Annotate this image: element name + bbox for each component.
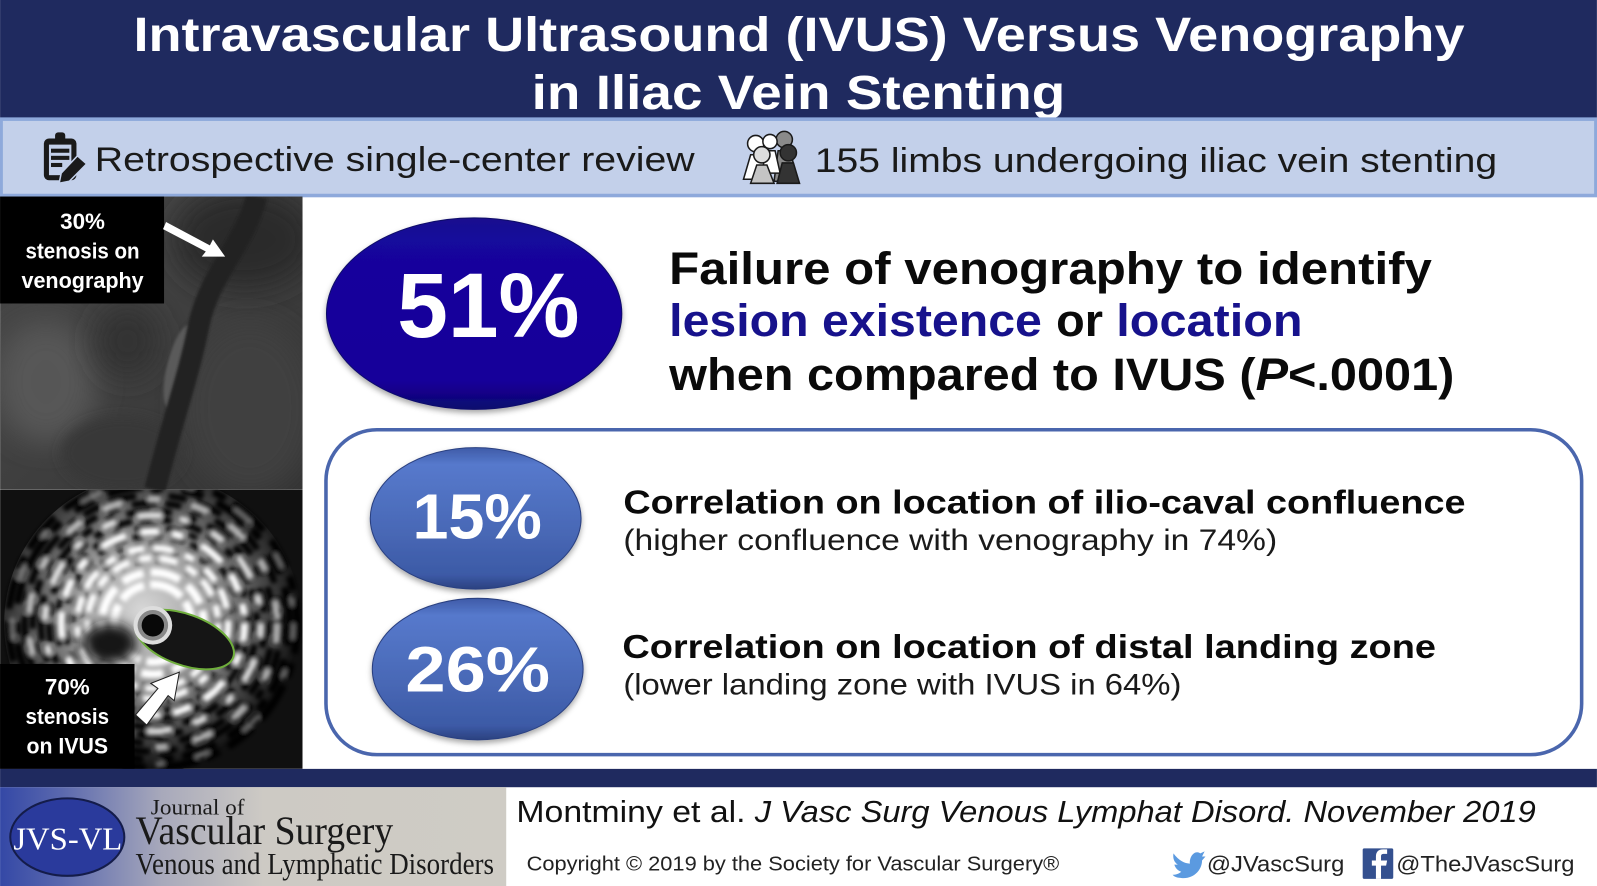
headline finding: or: [1056, 295, 1103, 346]
logo badge: [10, 798, 124, 876]
twitter handle: @JVascSurg: [1207, 852, 1344, 877]
title band: [0, 0, 1597, 120]
headline finding: when compared to IVUS ( P<.0001): [668, 349, 1454, 400]
facebook handle: [1363, 848, 1575, 879]
footer divider band: [0, 769, 1597, 787]
logo badge: JVS-VL: [13, 821, 122, 856]
icon: clipboard and pencil: [44, 132, 87, 183]
text: distal landing zone: [622, 629, 1436, 702]
label: 70% stenosis on IVUS: stenosis: [26, 704, 109, 729]
label: 70% stenosis on IVUS: 70%: [45, 675, 90, 700]
stat: 15%: 15%: [413, 481, 542, 553]
arrow: IVUS stenosis: [136, 672, 179, 725]
stat: 26%: [372, 598, 583, 740]
big stat: 51%: 51%: [397, 255, 580, 357]
text: ilio-caval confluence: Correlation on location of ilio-caval confluence: [623, 484, 1466, 521]
title line one: Intravascular Ultrasound (IVUS) Versus Venography: [133, 9, 1465, 62]
copyright: Copyright © 2019 by the Society for Vascular Surgery®: [527, 854, 1059, 876]
headline finding: Failure of venography to identify: [669, 243, 1432, 294]
title line two: in Iliac Vein Stenting: [532, 67, 1065, 120]
text: study design: Retrospective single-center review: [95, 141, 696, 179]
icon: twitter bird: [1173, 851, 1205, 878]
journal logo: Vascular Surgery: [136, 809, 393, 853]
text: distal landing zone: (lower landing zone with IVUS in 64%): [623, 669, 1181, 702]
journal logo: Venous and Lymphatic Disorders: [136, 847, 494, 881]
text: ilio-caval confluence: (higher confluence with venography in 74%): [623, 524, 1277, 557]
icon: group of people: [744, 131, 800, 183]
journal logo: [0, 787, 506, 886]
label: 30% stenosis on venography: [0, 197, 164, 303]
label: 30% stenosis on venography: venography: [21, 268, 144, 293]
facebook handle: @TheJVascSurg: [1396, 852, 1575, 877]
journal logo: Journal of: [151, 795, 245, 820]
lumen outline: [134, 606, 235, 670]
image: venography: [0, 188, 316, 494]
headline finding: [668, 243, 1454, 400]
text: study population: 155 limbs undergoing iliac vein stenting: [815, 142, 1497, 180]
citation: J Vasc Surg Venous Lymphat Disord. November 2019: [754, 795, 1536, 829]
label: 30% stenosis on venography: 30%: [60, 209, 105, 234]
image: IVUS cross-section: [0, 475, 303, 772]
label: 70% stenosis on IVUS: [0, 664, 135, 769]
citation: Montminy et al.: [516, 795, 746, 829]
text: ilio-caval confluence: [623, 484, 1466, 557]
headline finding: location: [1116, 295, 1303, 346]
study info band: [1, 119, 1596, 196]
arrow: venography stenosis: [163, 222, 225, 257]
stat: 26%: 26%: [405, 633, 550, 705]
panel: correlation results: [326, 430, 1582, 755]
label: 30% stenosis on venography: stenosis on: [26, 239, 140, 264]
big stat: 51%: [326, 218, 622, 409]
headline finding: lesion existence: [669, 295, 1042, 346]
label: 70% stenosis on IVUS: on IVUS: [27, 734, 108, 759]
text: distal landing zone: Correlation on location of distal landing zone: [622, 629, 1436, 666]
icon: facebook: [1363, 848, 1393, 879]
stat: 15%: [370, 448, 581, 589]
